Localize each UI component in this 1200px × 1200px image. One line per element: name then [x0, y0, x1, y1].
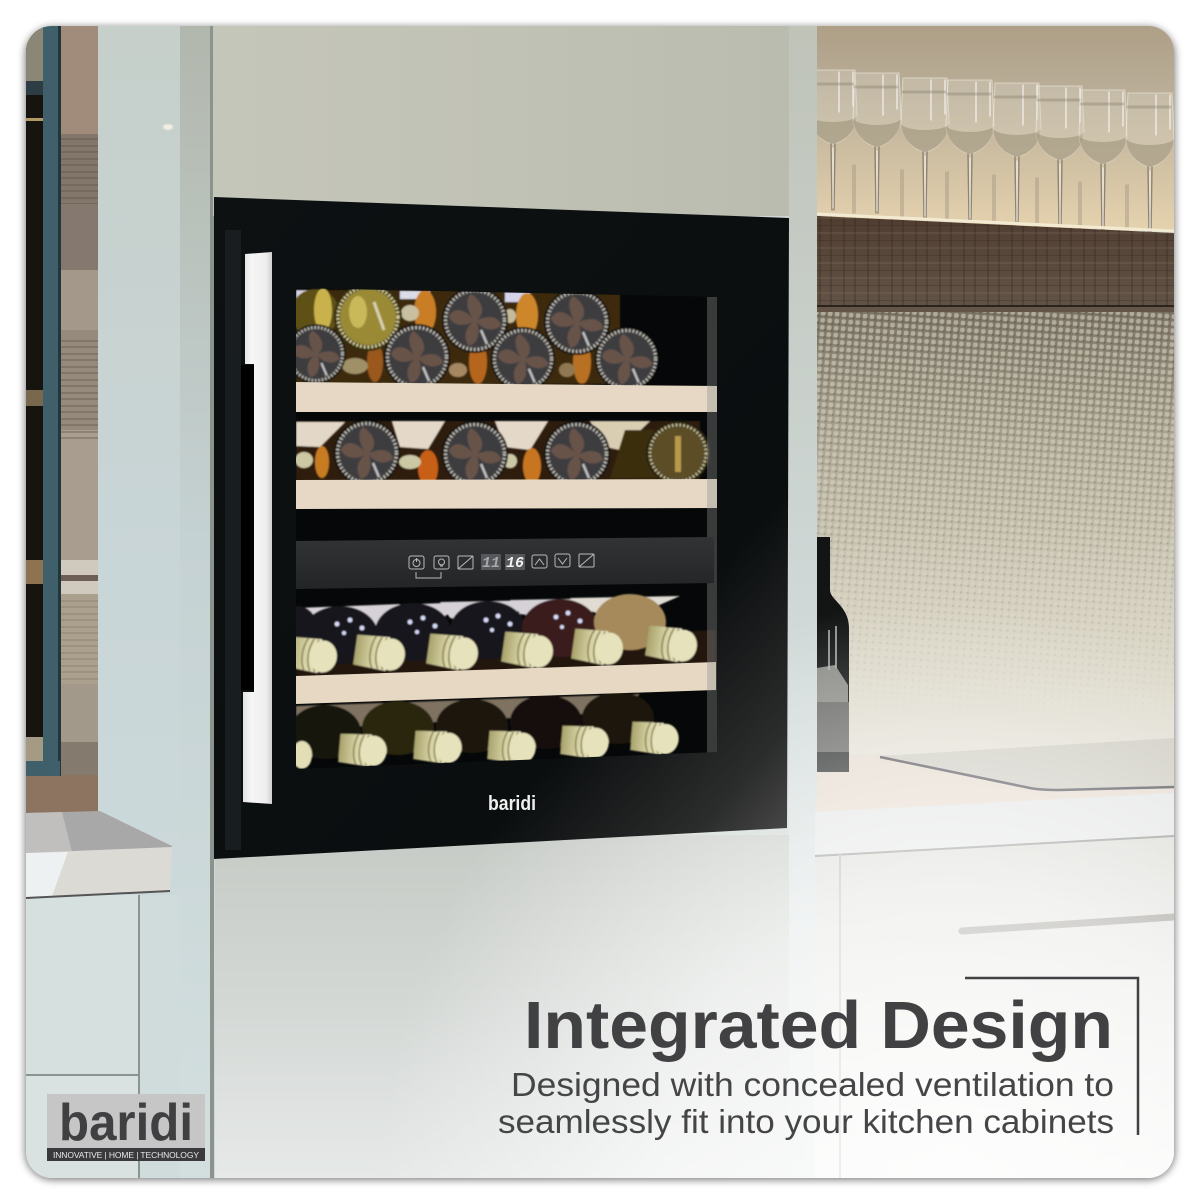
- dark brown shelf fascia: [817, 216, 1174, 320]
- rack interior with bottles: [278, 283, 716, 769]
- textured backsplash: [817, 312, 1174, 782]
- left marble counter: [26, 811, 172, 898]
- headline frame: [965, 978, 1138, 1135]
- right lower cabinets: [815, 793, 1174, 1178]
- wine glasses: [809, 70, 1174, 233]
- temperature display: 11: [482, 555, 500, 572]
- down button: [555, 554, 570, 567]
- bottom center cabinet panel: [215, 835, 790, 1178]
- lock bracket: [416, 572, 441, 578]
- control panel: [296, 537, 714, 589]
- second rack bottles: [295, 420, 710, 487]
- door logo: baridi: [488, 793, 536, 815]
- right divider column: [789, 26, 817, 922]
- temperature display: [481, 554, 525, 570]
- wine bottle on counter: [817, 537, 849, 772]
- wine cooler: [214, 197, 789, 859]
- left window and exterior: [26, 26, 98, 813]
- door handle: [241, 252, 272, 804]
- lower wooden shelf: [296, 662, 716, 704]
- right countertop surface: [817, 782, 1174, 812]
- light button: [434, 556, 449, 569]
- title: Integrated Design: [524, 988, 1113, 1063]
- soft white vignette behind text: [496, 626, 1174, 1178]
- brand logo badge: INNOVATIVE | HOME | TECHNOLOGY: [53, 1150, 199, 1160]
- glass window with bottles: [278, 283, 717, 773]
- bottom rack bottles: [289, 692, 680, 769]
- temperature display: 16: [506, 555, 524, 572]
- glass shelf recess: [809, 26, 1174, 233]
- upper rack bottles: [296, 288, 659, 386]
- subtitle: [498, 1066, 1114, 1140]
- drawer handle: [962, 917, 1174, 931]
- top center cabinet panel: [213, 26, 790, 216]
- upper wooden shelf: [296, 382, 717, 412]
- induction hob: [880, 738, 1174, 790]
- brand logo badge: baridi: [59, 1094, 193, 1152]
- subtitle: seamlessly fit into your kitchen cabinets: [498, 1103, 1114, 1140]
- black door: [214, 197, 789, 859]
- subtitle: Designed with concealed ventilation to: [511, 1066, 1114, 1103]
- up button: [532, 555, 547, 568]
- second wooden shelf: [296, 479, 717, 509]
- power button: [409, 556, 424, 569]
- glass reflection strip: [707, 297, 717, 753]
- zone button: [458, 556, 473, 569]
- left cabinet column: [98, 26, 214, 1178]
- left lower cabinet: [26, 895, 140, 1178]
- temperature unit button: [579, 554, 594, 567]
- lower rack bottles: [278, 594, 716, 690]
